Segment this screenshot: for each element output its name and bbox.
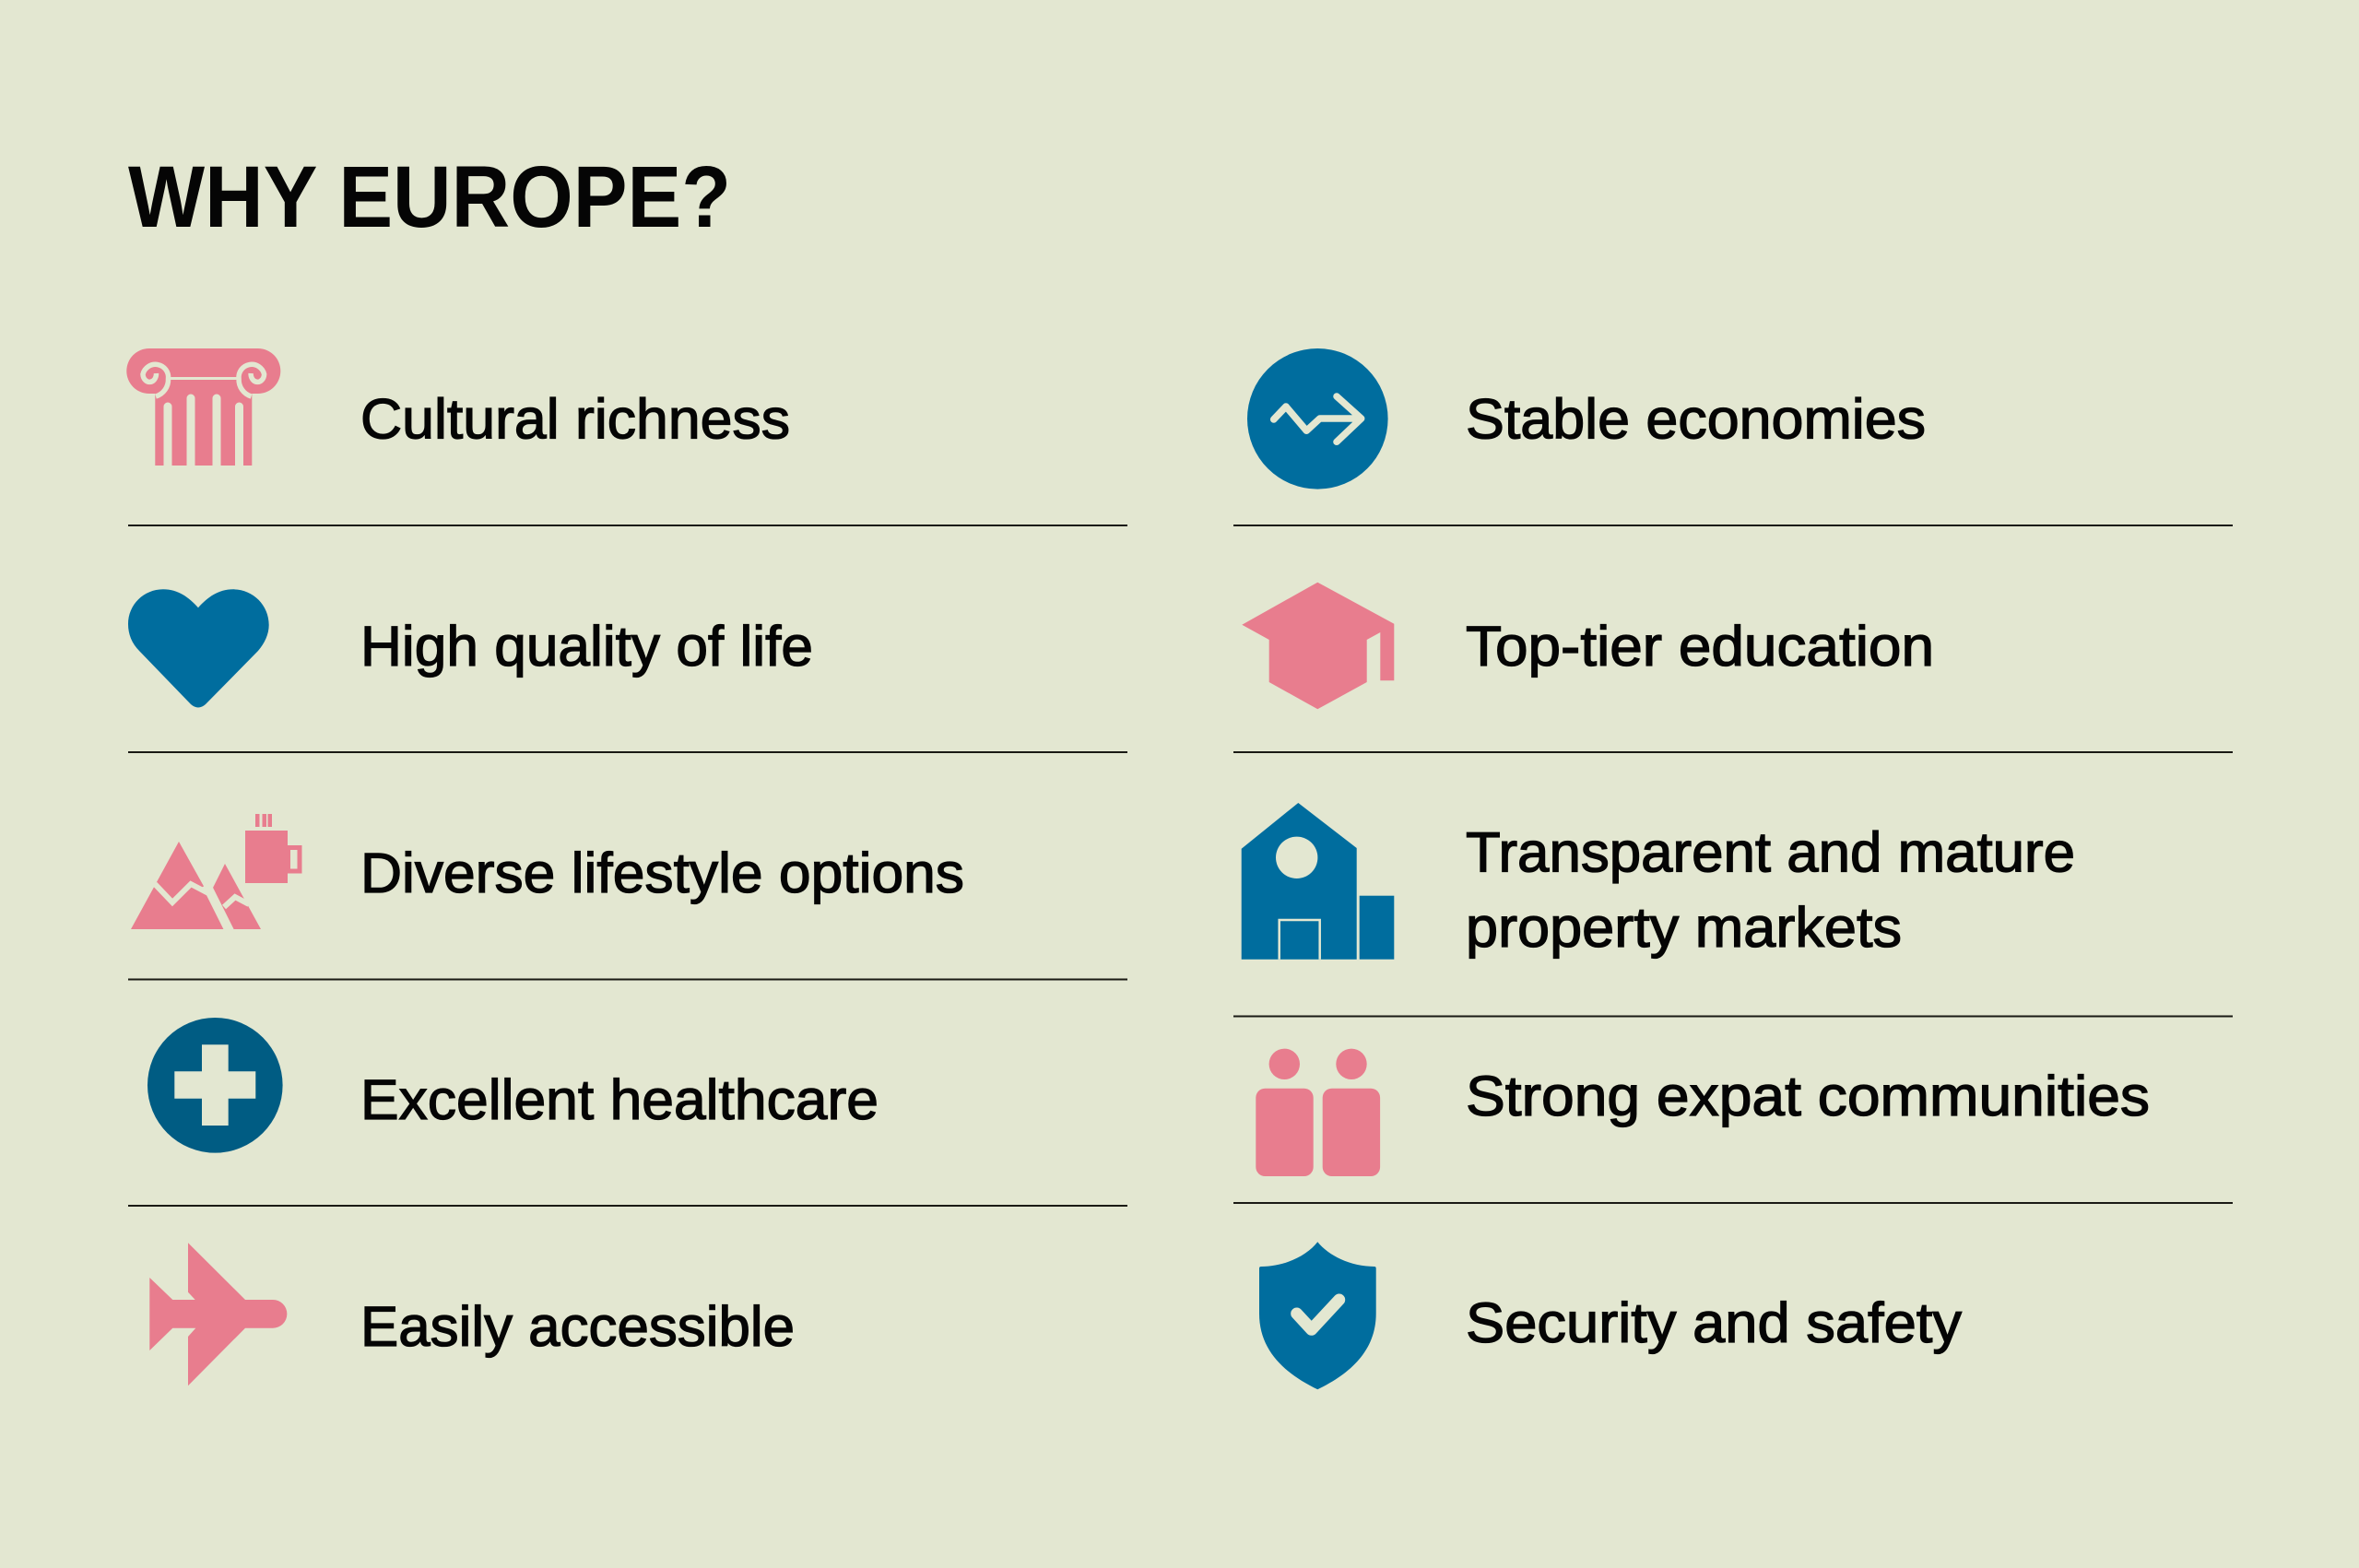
icon: mountains and mug	[131, 814, 300, 933]
label: stable economies: Stable economies	[1466, 387, 1926, 450]
row: strong expat communities	[1256, 1049, 2150, 1176]
label: top-tier education: Top-tier education	[1466, 615, 1934, 678]
icon: ionic column	[126, 348, 280, 466]
icon: heart	[128, 589, 269, 708]
label: diverse lifestyle options: Diverse lifestyle options	[360, 842, 964, 904]
row: top-tier education	[1242, 583, 1934, 709]
label: cultural richness: Cultural richness	[360, 387, 790, 450]
icon: airplane	[149, 1243, 287, 1385]
row: security and safety	[1259, 1242, 1963, 1389]
icon: shield with check	[1259, 1242, 1376, 1389]
row: cultural richness	[126, 348, 790, 466]
row: diverse lifestyle options	[131, 814, 964, 933]
label: high quality of life: High quality of life	[360, 615, 813, 678]
label: transparent and mature property markets	[1466, 820, 2075, 959]
label: transparent and mature property markets: Transparent and mature	[1466, 820, 2075, 883]
icon: two people	[1256, 1049, 1380, 1176]
label: transparent and mature property markets: property markets	[1466, 896, 1902, 959]
label: excellent healthcare: Excellent healthcare	[360, 1068, 879, 1131]
label: easily accessible: Easily accessible	[360, 1295, 795, 1358]
row: high quality of life	[128, 589, 813, 708]
label: security and safety: Security and safety	[1466, 1291, 1963, 1354]
row: excellent healthcare	[147, 1018, 879, 1153]
icon: medical cross	[147, 1018, 283, 1153]
row: easily accessible	[149, 1243, 795, 1385]
title: WHY EUROPE?	[128, 148, 731, 246]
row: property markets	[1242, 803, 2075, 960]
icon: house	[1242, 803, 1394, 960]
row: stable economies	[1247, 348, 1926, 489]
label: strong expat communities: Strong expat communities	[1466, 1065, 2150, 1127]
icon: trend arrow	[1247, 348, 1388, 489]
icon: graduation cap	[1242, 583, 1394, 709]
